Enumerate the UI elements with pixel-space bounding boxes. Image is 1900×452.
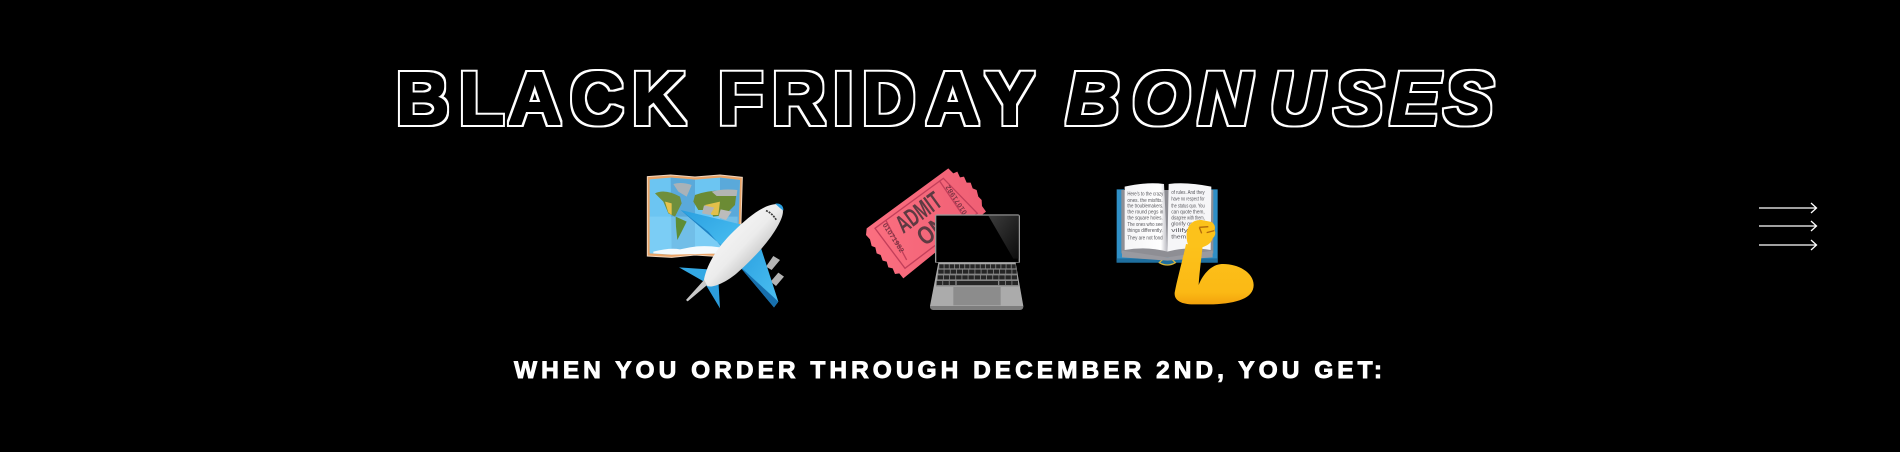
arrow 1	[1759, 203, 1816, 213]
ticket text	[890, 187, 961, 257]
book text: have no respect for	[1171, 197, 1205, 203]
book text: glorify or	[1171, 221, 1192, 227]
book text: of rules. And they	[1171, 190, 1205, 196]
book text: things differently.	[1127, 228, 1163, 234]
ticket: 01071982	[881, 222, 905, 254]
title: BLACK FRIDAY	[396, 57, 1034, 140]
book text: disagree with them,	[1171, 215, 1205, 221]
book text: They are not fond	[1127, 235, 1163, 241]
book text	[1127, 190, 1205, 241]
airplane	[679, 203, 784, 308]
book text: The ones who see	[1127, 222, 1163, 228]
map	[647, 175, 742, 257]
book text: the status quo. You	[1171, 203, 1205, 209]
ticket: 01071982	[945, 183, 969, 215]
icon: open book and flexed biceps	[1117, 183, 1254, 304]
book text: the square holes.	[1127, 215, 1163, 221]
ticket text: ON	[912, 211, 953, 251]
book text: the troublemakers.	[1127, 203, 1163, 209]
subheading: WHEN YOU ORDER THROUGH DECEMBER 2ND, YOU GET:	[514, 357, 1382, 384]
arrows	[1759, 203, 1816, 250]
icon: map and airplane	[647, 175, 784, 308]
ticket	[866, 168, 986, 278]
book text: ones. the misfits.	[1127, 198, 1163, 204]
laptop	[930, 214, 1023, 310]
book text: can quote them,	[1171, 209, 1205, 215]
book text: vilify	[1171, 228, 1189, 234]
book	[1117, 183, 1218, 265]
title: BONUSES	[1066, 57, 1493, 140]
book text: them.	[1171, 235, 1188, 241]
arm	[1175, 220, 1254, 304]
ticket text: ADMIT	[890, 187, 948, 239]
arrow 2	[1759, 221, 1816, 231]
arrow 3	[1759, 240, 1816, 250]
book text: the round pegs in	[1127, 209, 1163, 215]
title	[396, 57, 1493, 140]
book text: Here's to the crazy	[1127, 191, 1164, 197]
icon: ticket and laptop	[866, 168, 1023, 310]
